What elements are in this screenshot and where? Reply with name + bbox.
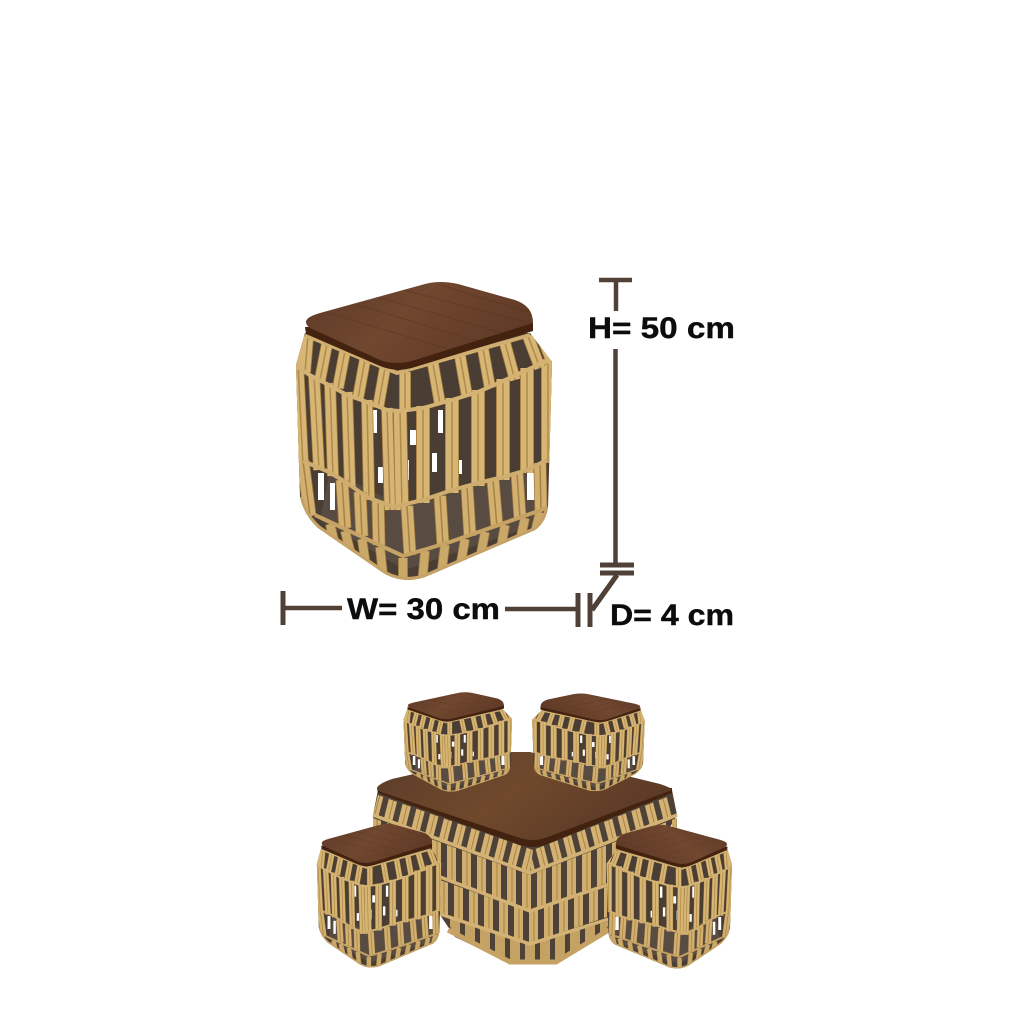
depth dimension line [590,573,634,627]
stool: top left [403,692,512,793]
product photo: table and four stools set [316,692,732,971]
stool: bottom right [607,825,732,971]
stool: bottom left [316,824,441,970]
width label: W= 30 cm [347,593,500,626]
coffee table [373,752,677,963]
infographic: product dimensions [280,278,734,968]
height dimension line [599,280,634,565]
depth label: D= 4 cm [610,599,734,632]
product photo: rattan stool with wood top [295,282,552,585]
stool: top right [532,693,645,793]
height label: H= 50 cm [588,312,735,345]
width dimension line [283,591,578,627]
